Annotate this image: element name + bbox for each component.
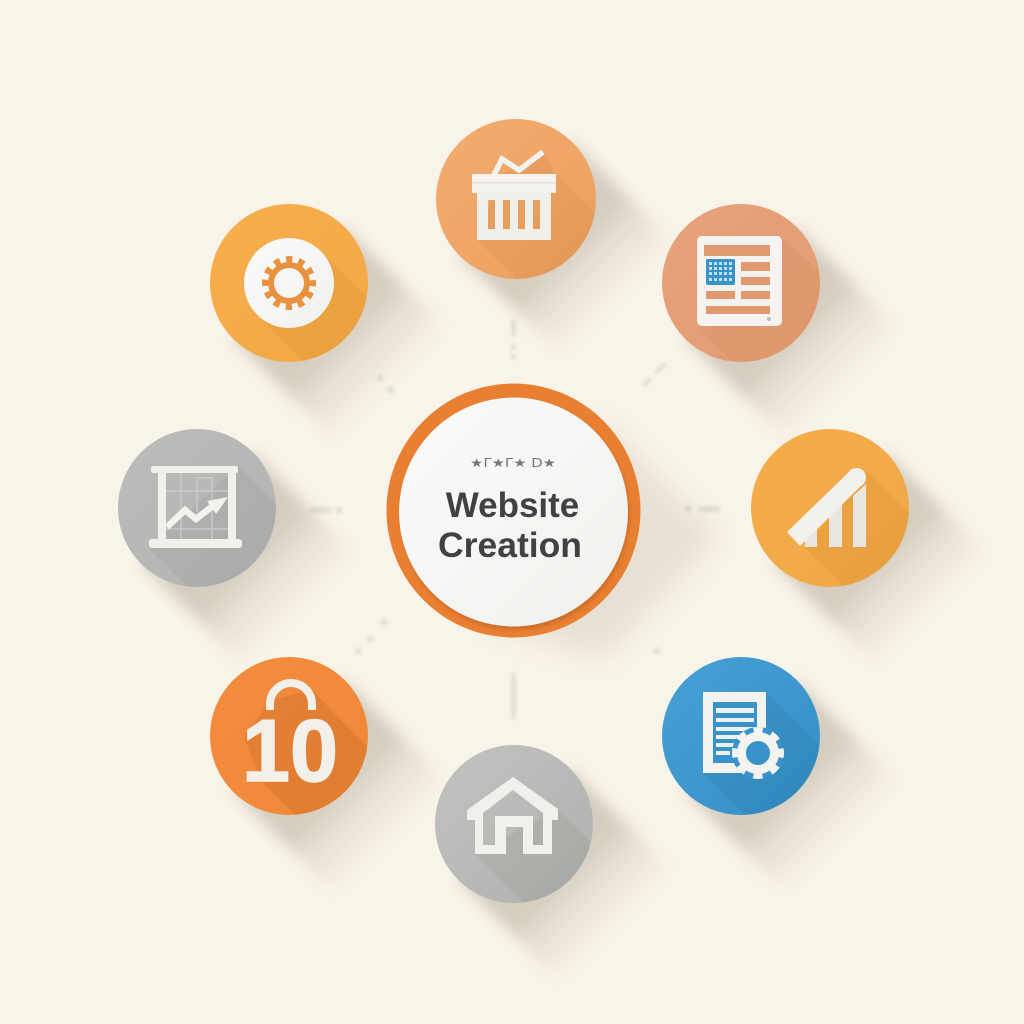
icon: gear in white disc: [244, 238, 334, 328]
icon: document and gear: [703, 692, 784, 779]
hub small star line: ★Γ★Γ★ D★: [470, 456, 556, 470]
node: document with gear: [662, 657, 882, 877]
icon: house: [467, 777, 558, 854]
icon: chart frame: [149, 466, 242, 548]
node: number ten with padlock shackle: [210, 657, 430, 877]
node: home: [435, 745, 654, 965]
node: growth chart: [118, 429, 338, 649]
node: rising signal bars: [751, 429, 970, 649]
hub title: Creation: [438, 525, 582, 565]
icon: padlock shackle: [270, 683, 312, 710]
icon: bars with diagonal: [787, 468, 866, 547]
node: basket with trend line: [436, 119, 658, 339]
connector marks between hub and nodes: [309, 320, 721, 720]
number 10: 10: [242, 701, 338, 800]
hub title: Website: [446, 486, 579, 525]
node: web page layout: [662, 204, 882, 424]
central hub: Website Creation: [386, 384, 720, 660]
icon: page layout: [697, 236, 782, 326]
node: gear setting: [210, 204, 430, 424]
icon: basket: [472, 152, 556, 240]
